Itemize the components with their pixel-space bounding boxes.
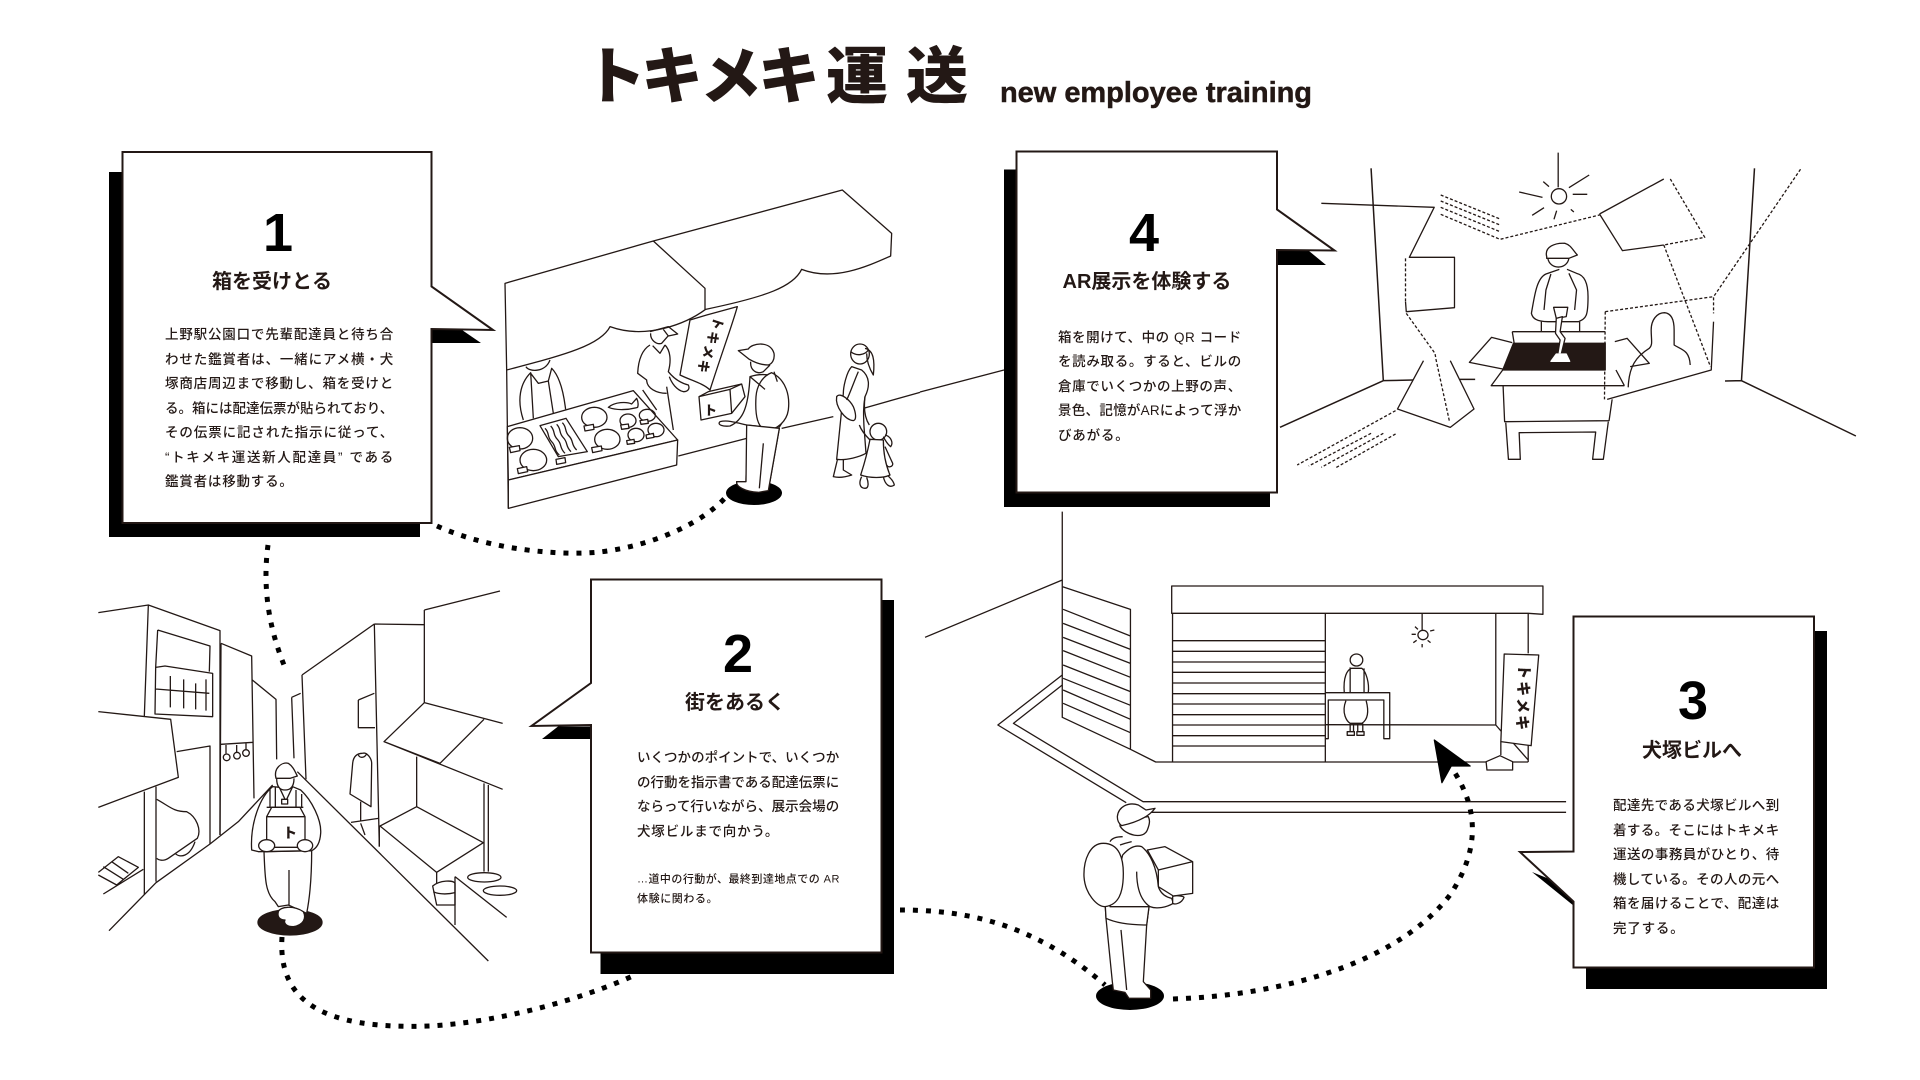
body 3: 機している。その人の元へ <box>1613 872 1780 887</box>
box mark: ト <box>283 825 297 841</box>
footnote 2: 体験に関わる。 <box>637 891 718 905</box>
body 4: を読み取る。すると、ビルの <box>1058 353 1242 369</box>
body 2: 犬塚ビルまで向かう。 <box>637 824 779 839</box>
illustration: AR exhibition room <box>1280 153 1856 468</box>
number 1: 1 <box>263 203 293 263</box>
panel: step 1 <box>109 152 493 537</box>
box mark: ト <box>704 403 717 418</box>
body 4: 箱を開けて、中の QR コード <box>1058 330 1242 345</box>
body 4: 倉庫でいくつかの上野の声、 <box>1058 378 1242 394</box>
body 2: ならって行いながら、展示会場の <box>637 798 840 814</box>
body 2 <box>637 750 840 839</box>
entrance banner text: トキメキ <box>1513 664 1532 732</box>
body 3: 運送の事務員がひとり、待 <box>1613 846 1780 862</box>
stall banner text: トキメキ <box>694 315 726 377</box>
title logo: トキメキ運送 <box>584 43 968 112</box>
body 2: の行動を指示書である配達伝票に <box>637 775 840 790</box>
body 1 <box>165 327 394 489</box>
illustration: Inuzuka building <box>925 512 1566 812</box>
illustration: narrow street scene <box>98 591 517 961</box>
heading 4: AR展示を体験する <box>1063 270 1231 293</box>
stall courier legs <box>737 425 779 492</box>
body 3 <box>1613 798 1780 936</box>
number 4: 4 <box>1129 203 1159 263</box>
figure: courier holding the box on black marker <box>726 425 1193 1010</box>
panel: step 2 <box>532 580 894 974</box>
route: dotted walking path <box>266 498 1472 1026</box>
body 1: 鑑賞者は移動する。 <box>165 473 294 489</box>
body 1: る。箱には配達伝票が貼られており、 <box>165 400 394 416</box>
number 2: 2 <box>723 624 753 684</box>
heading 2: 街をあるく <box>685 691 785 714</box>
heading 1: 箱を受けとる <box>212 270 332 293</box>
footnote 2: …道中の行動が、最終到達地点での AR <box>637 872 840 886</box>
body 3: 完了する。 <box>1613 921 1684 936</box>
body 4: 景色、記憶がARによって浮か <box>1058 402 1242 418</box>
body 3: 箱を届けることで、配達は <box>1613 896 1780 911</box>
body 3: 着する。そこにはトキメキ <box>1613 823 1780 838</box>
body 1: “トキメキ運送新人配達員” である <box>165 450 394 465</box>
body 1: その伝票に記された指示に従って、 <box>165 425 394 440</box>
heading 3: 犬塚ビルへ <box>1642 739 1742 762</box>
body 2: いくつかのポイントで、いくつか <box>637 750 840 765</box>
body 4 <box>1058 330 1242 443</box>
body 1: 上野駅公園口で先輩配達員と待ち合 <box>165 327 394 342</box>
panel: step 3 <box>1520 616 1827 989</box>
body 4: びあがる。 <box>1058 427 1130 443</box>
line: stall road link <box>920 370 1004 392</box>
body 3: 配達先である犬塚ビルへ到 <box>1613 798 1780 813</box>
body 1: わせた鑑賞者は、一緒にアメ横・犬 <box>165 351 394 367</box>
subtitle: new employee training <box>1000 77 1312 109</box>
illustration: market stall scene <box>505 190 920 508</box>
footnote 2 <box>637 872 840 905</box>
number 3: 3 <box>1678 671 1708 731</box>
panel: step 4 <box>1004 152 1334 507</box>
body 1: 塚商店周辺まで移動し、箱を受けと <box>165 375 394 391</box>
